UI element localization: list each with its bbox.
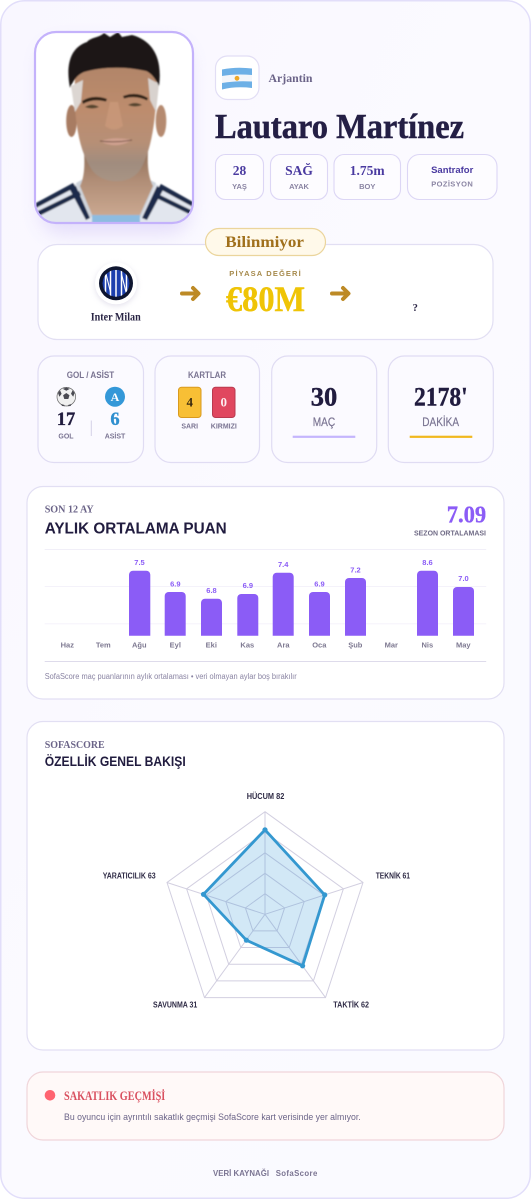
nationality: Arjantin	[268, 73, 313, 85]
injury body text: Bu oyuncu için ayrıntılı sakatlık geçmişi SofaScore kart verisinde yer almıyor.	[64, 1112, 361, 1122]
stat card: goals and assists	[38, 356, 144, 462]
stat card: cards: KIRMIZI	[211, 424, 237, 431]
bar chart: 6.9	[314, 579, 325, 588]
season average	[414, 502, 486, 537]
stat card: minutes	[388, 356, 493, 462]
bar chart	[45, 549, 486, 649]
header: player profile	[35, 32, 497, 234]
chip: foot: SAĞ	[285, 163, 313, 178]
panel heading: AYLIK ORTALAMA PUAN	[45, 520, 227, 537]
bar chart: Tem	[96, 640, 111, 649]
panel: market value	[38, 228, 493, 340]
footer source: SofaScore	[276, 1169, 318, 1178]
stat card: matches: 30	[311, 382, 337, 412]
panel: monthly average rating	[27, 486, 504, 699]
icon: football	[57, 387, 76, 406]
bar chart: Eki	[206, 640, 217, 649]
nationality flag badge	[216, 56, 259, 100]
chip: foot	[270, 154, 328, 200]
radar chart	[103, 792, 410, 1010]
stat card: minutes: 2178'	[414, 382, 468, 412]
bar chart: Mar	[385, 640, 398, 649]
arrow: from club	[182, 288, 198, 299]
bar chart: Şub	[348, 640, 363, 649]
bar chart: 6.9	[243, 581, 253, 590]
stat card: goals and assists: 17	[57, 410, 75, 430]
panel heading: SOFASCORE	[45, 740, 105, 751]
red card: 0	[221, 395, 227, 410]
status dot	[45, 1090, 55, 1101]
bar chart: 7.5	[134, 558, 145, 567]
bar chart: 7.4	[278, 560, 289, 569]
bar chart: 6.8	[206, 586, 217, 595]
bar chart: Kas	[240, 640, 254, 649]
bar chart: Nis	[421, 640, 433, 649]
data polygon	[204, 830, 325, 966]
club: Inter Milan: Inter Milan	[91, 311, 141, 323]
status pill	[206, 228, 326, 256]
bar chart: 7.2	[350, 565, 361, 574]
chip: age	[216, 154, 264, 200]
bar chart: 8.6	[422, 558, 433, 567]
injury heading: SAKATLIK GEÇMİŞİ	[64, 1089, 165, 1103]
bar chart: Oca	[312, 640, 327, 649]
radar chart: TEKNİK 61	[376, 872, 410, 881]
player portrait	[35, 32, 193, 234]
bar chart: Ağu	[132, 640, 147, 649]
market value figure: €80M	[226, 279, 305, 319]
stat card: goals and assists: GOL	[58, 434, 74, 441]
season average: 7.09	[447, 502, 486, 528]
stat card: minutes: DAKİKA	[422, 416, 459, 429]
stat card: goals and assists: ASİST	[105, 433, 126, 441]
chip: foot: AYAK	[289, 182, 310, 191]
bar chart: Haz	[61, 640, 74, 649]
panel heading	[45, 740, 186, 769]
panel heading: ÖZELLİK GENEL BAKIŞI	[45, 753, 186, 769]
bar chart: May	[456, 640, 471, 649]
chip: height: BOY	[359, 182, 375, 191]
chip: position	[408, 154, 497, 200]
player name: Lautaro Martínez	[215, 107, 464, 146]
stat card: matches: MAÇ	[313, 417, 335, 429]
unknown destination club: ?	[413, 303, 418, 314]
radar chart: YARATICILIK 63	[103, 872, 156, 881]
market value figure: PİYASA DEĞERİ	[229, 269, 301, 278]
bar chart: 6.9	[170, 579, 181, 588]
radar chart: SAVUNMA 31	[153, 1001, 198, 1010]
season average: SEZON ORTALAMASI	[414, 528, 486, 537]
panel heading	[45, 504, 227, 537]
stat card: goals and assists: GOL / ASİST	[67, 370, 115, 380]
status pill: Bilinmiyor	[225, 234, 304, 251]
club: Inter Milan	[91, 266, 141, 320]
footer source	[213, 1169, 318, 1178]
arrow: to club	[332, 288, 348, 299]
chip: height: 1.75m	[350, 163, 385, 178]
chart footnote: SofaScore maç puanlarının aylık ortalaması • veri olmayan aylar boş bırakılır	[45, 672, 297, 681]
panel heading: SON 12 AY	[45, 504, 94, 515]
bar chart: Eyl	[170, 640, 181, 649]
yellow card: 4	[186, 395, 193, 410]
bar chart: 7.0	[458, 574, 469, 583]
stat card: goals and assists: 6	[110, 410, 120, 430]
bar chart: Ara	[277, 640, 290, 649]
stat card: cards: KARTLAR	[188, 370, 226, 380]
stat card: cards	[155, 356, 260, 462]
stat card: cards: SARI	[181, 424, 198, 431]
chip: position: POZİSYON	[431, 180, 473, 188]
chip: age: 28	[233, 163, 246, 178]
panel: attribute overview	[27, 722, 504, 1050]
stat card: matches	[272, 356, 377, 462]
panel: injury history	[27, 1072, 504, 1140]
chip: height	[334, 154, 400, 200]
icon: assist badge: A	[111, 390, 120, 404]
footer source: VERİ KAYNAĞI	[213, 1169, 269, 1178]
radar chart: HÜCUM 82	[247, 792, 285, 801]
chip: age: YAŞ	[232, 182, 247, 191]
radar chart: TAKTİK 62	[333, 1001, 369, 1010]
chip: position: Santrafor	[431, 165, 474, 176]
